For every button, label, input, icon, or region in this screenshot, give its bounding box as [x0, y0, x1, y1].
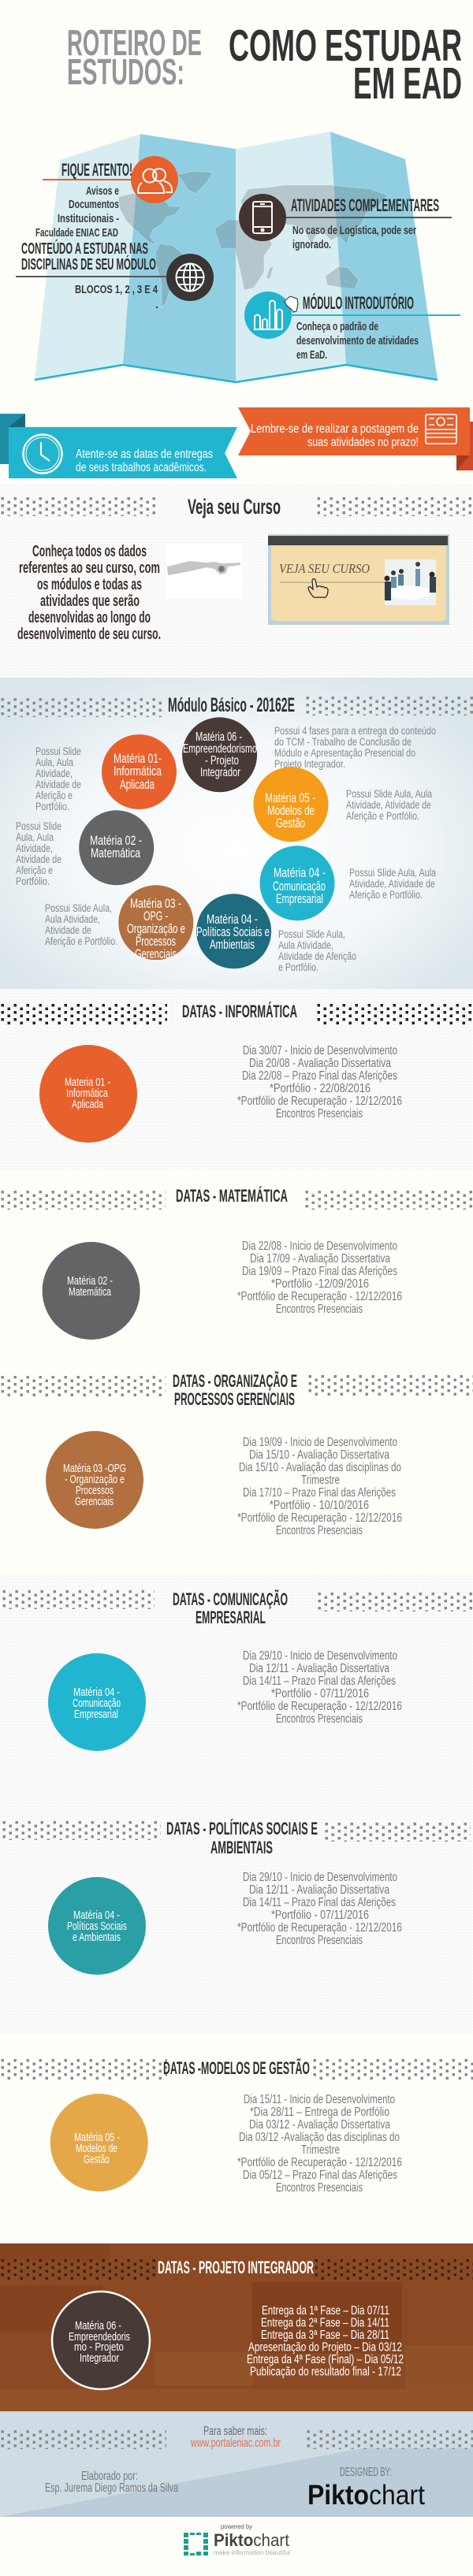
callout: fique atento: Documentos: [69, 198, 119, 211]
dates: Encontros Presenciais: [276, 1107, 363, 1121]
dates: Trimestre: [301, 2143, 340, 2157]
heading: módulo básico: Módulo Básico - 20162E: [168, 694, 295, 716]
circle: matéria 04 políticas: Políticas Sociais e: [196, 925, 270, 939]
circle: matéria 03: Processos: [136, 935, 176, 949]
circle: matéria 05: Matéria 05 -: [265, 791, 315, 805]
dates: [237, 1436, 402, 1537]
description: matéria 04 comunicação: Atividade, Atividade de: [349, 878, 435, 890]
circle: matéria 05: Gestão: [276, 816, 305, 831]
dates: Encontros Presenciais: [276, 1934, 363, 1947]
description: matéria 06: Possui 4 fases para a entrega do conteúdo: [274, 725, 436, 737]
heading: AMBIENTAIS: [210, 1838, 273, 1857]
callout: atividades complementares: [239, 194, 452, 251]
dates: [247, 2304, 404, 2378]
circle: matéria 04 políticas: Matéria 04 -: [207, 913, 258, 927]
circle: matéria 03: - Organização e: [65, 1474, 125, 1486]
dates: Trimestre: [301, 1474, 340, 1487]
circle: matéria 01: [102, 734, 177, 809]
circle: matéria 02: [79, 810, 154, 885]
dates: Entrega da 4ª Fase (Final) – Dia 05/12: [247, 2353, 404, 2366]
text: designed by: DESIGNED BY:: [340, 2466, 392, 2479]
heading: DATAS - COMUNICAÇÃO: [173, 1589, 288, 1609]
description: matéria 01: Aferição e: [35, 790, 73, 801]
text: elaborado por: Elaborado por:: [81, 2470, 138, 2483]
circle: matéria 04: Matéria 04 -: [73, 1686, 120, 1699]
dates: *Portfólio - 07/11/2016: [271, 1909, 369, 1922]
heading: DATAS - INFORMÁTICA: [182, 1002, 297, 1021]
circle: matéria 02: [43, 1242, 140, 1340]
description: matéria 03: Possui Slide Aula,: [45, 902, 112, 914]
circle: matéria 06: mo - Projeto: [74, 2341, 124, 2354]
badge: powered by piktochart: powered by: [221, 2523, 252, 2530]
callout: fique atento: Avisos e: [86, 184, 119, 198]
circle: matéria 04: e Ambientais: [73, 1931, 121, 1944]
description: matéria 02: Portfólio.: [16, 875, 50, 887]
dates: Dia 14/11 – Prazo Final das Aferições: [243, 1896, 396, 1909]
description: matéria 06: do TCM - Trabalho de Conclusão de: [274, 736, 412, 748]
dates: Dia 20/08 - Avaliação Dissertativa: [249, 1057, 391, 1070]
section: datas modelos de gestão: [0, 2058, 473, 2195]
circle: matéria 02: Matéria 02 -: [90, 834, 142, 848]
panel: folded map: [35, 132, 438, 382]
dates: Encontros Presenciais: [276, 1524, 363, 1537]
circle: matéria 01: Aplicada: [120, 778, 155, 792]
circle: matéria 04 comunicação: Empresarial: [276, 892, 323, 906]
circle: matéria 04 políticas: Ambientais: [210, 938, 255, 952]
callout: atividades complementares: ignorado.: [292, 238, 331, 251]
text block: conheça: os módulos e todas as: [37, 576, 142, 593]
heading: [173, 1589, 288, 1627]
dates: Publicação do resultado final - 17/12: [250, 2366, 401, 2378]
text: para saber mais: Para saber mais:: [203, 2425, 267, 2438]
description: matéria 02: Aferição e: [16, 864, 53, 876]
dates: *Dia 28/11 – Entrega de Portfólio: [250, 2106, 389, 2119]
circle: matéria 03: [46, 1431, 143, 1529]
dates: Encontros Presenciais: [276, 1303, 363, 1316]
badge: powered by piktochart: make information beautiful: [214, 2549, 290, 2556]
section: datas matemática: [0, 1186, 473, 1340]
description: matéria 02: Possui Slide: [16, 820, 61, 832]
description: matéria 04 políticas: [278, 928, 356, 973]
description: matéria 06: Módulo e Apresentação Presencial do: [274, 747, 415, 759]
circle: matéria 06: Empreendedorismo: [183, 742, 257, 756]
card: veja seu curso: VEJA SEU CURSO: [279, 561, 370, 576]
text: elaborado por: [45, 2470, 178, 2495]
dates: Encontros Presenciais: [276, 1712, 363, 1726]
dates: [237, 1240, 402, 1316]
heading: DATAS - MATEMÁTICA: [176, 1186, 288, 1206]
circle: matéria 01: Informática: [66, 1087, 109, 1100]
text block: conheça: atividades que serão: [40, 593, 140, 610]
callout: fique atento: [35, 156, 178, 240]
dates: Dia 05/12 – Prazo Final das Aferições: [243, 2169, 397, 2182]
circle: matéria 02: Matéria 02 -: [67, 1275, 113, 1288]
callout: conteúdo a estudar: BLOCOS 1, 2 , 3 E 4: [75, 283, 158, 296]
circle: matéria 05: Modelos de: [267, 804, 315, 818]
circle: matéria 04: Comunicação: [73, 1697, 121, 1710]
circle: matéria 02: Matemática: [69, 1286, 112, 1299]
section: projeto integrador on wood: [0, 2243, 473, 2411]
description: matéria 01: Atividade,: [35, 768, 73, 779]
circle: matéria 06: Integrador: [200, 766, 240, 779]
description: matéria 01: Portfólio.: [35, 801, 69, 812]
dates: Encontros Presenciais: [276, 2181, 363, 2195]
circle: matéria 04 políticas: [196, 894, 271, 968]
dates: Apresentação do Projeto – Dia 03/12: [248, 2340, 402, 2355]
banner: orange reminder: suas atividades no prazo!: [307, 436, 419, 449]
description: matéria 03: Aula Atividade,: [45, 913, 100, 925]
dates: *Portfólio - 22/08/2016: [270, 1082, 371, 1095]
circle: matéria 05: Matéria 05 -: [74, 2132, 120, 2144]
heading: PROCESSOS GERENCIAIS: [174, 1389, 295, 1409]
circle: matéria 05: [254, 767, 328, 842]
section: datas organização: [0, 1371, 473, 1537]
description: matéria 03: Atividade de: [45, 924, 91, 936]
text: elaborado por: Esp. Jurema Diego Ramos da Silva: [45, 2481, 178, 2495]
dates: Entrega da 2ª Fase – Dia 14/11: [261, 2317, 389, 2329]
circle: matéria 04 comunicação: Matéria 04 -: [274, 866, 326, 880]
dates: [237, 1649, 402, 1726]
description: matéria 05: Aferição e Portfólio.: [346, 810, 419, 822]
panel: footer: [0, 2411, 473, 2517]
dates: Dia 17/09 - Avaliação Dissertativa: [250, 1252, 390, 1266]
title: roteiro de estudos: [67, 22, 202, 92]
dates: Dia 22/08 - Inicio de Desenvolvimento: [242, 1240, 397, 1253]
dates: Dia 12/11 - Avaliação Dissertativa: [249, 1883, 389, 1897]
dates: *Portfólio de Recuperação - 12/12/2016: [237, 1700, 402, 1713]
description: matéria 04 comunicação: [349, 867, 436, 901]
circle: matéria 04: Políticas Sociais: [67, 1920, 127, 1933]
heading: veja seu curso: Veja seu Curso: [188, 495, 281, 519]
circle: matéria 06: Matéria 06 -: [75, 2320, 121, 2333]
dates: Dia 14/11 – Prazo Final das Aferições: [243, 1675, 396, 1688]
dates: Dia 29/10 - Inicio de Desenvolvimento: [243, 1871, 397, 1884]
dates: Dia 15/10 - Avaliação Dissertativa: [249, 1448, 389, 1462]
circle: matéria 03: OPG -: [143, 909, 168, 924]
circle: matéria 06: Empreendedoris: [69, 2331, 130, 2344]
text block: conheça: Conheça todos os dados: [32, 543, 147, 560]
dates: Entrega da 1ª Fase – Dia 07/11: [262, 2304, 389, 2318]
description: matéria 06: Projeto Integrador.: [274, 758, 345, 770]
dates: *Portfólio -12/09/2016: [271, 1277, 369, 1291]
dates: Dia 22/08 – Prazo Final das Aferições: [242, 1069, 397, 1083]
text block: conheça: desenvolvimento de seu curso.: [17, 626, 161, 643]
dates: [237, 1044, 402, 1121]
circle: matéria 06: Matéria 06 -: [196, 730, 242, 744]
circle: matéria 06: [52, 2292, 150, 2389]
callout: módulo introdutório: em EaD.: [296, 348, 327, 362]
description: matéria 05: [346, 788, 432, 822]
icon: people: [131, 156, 178, 203]
description: matéria 04 políticas: e Portfólio.: [278, 961, 318, 973]
section: datas comunicação: [2, 1589, 473, 1751]
callout: módulo introdutório: desenvolvimento de atividades: [296, 334, 419, 348]
badge: powered by piktochart: Piktochart: [214, 2530, 289, 2550]
circle: matéria 04 comunicação: Comunicação: [273, 879, 326, 894]
heading: DATAS - POLÍTICAS SOCIAIS E: [166, 1819, 318, 1838]
dates: Dia 12/11 - Avaliação Dissertativa: [249, 1662, 389, 1675]
heading: DATAS -MODELOS DE GESTÃO: [163, 2058, 310, 2078]
heading: veja seu curso: [0, 495, 473, 519]
circle: matéria 01: [39, 1045, 137, 1143]
dates: *Portfólio de Recuperação - 12/12/2016: [237, 1511, 402, 1525]
dates: Dia 19/09 - Inicio de Desenvolvimento: [243, 1436, 397, 1449]
dates: [237, 2093, 402, 2195]
description: matéria 02: [16, 820, 61, 887]
world map: [118, 171, 388, 307]
text block: conheça: [17, 543, 161, 643]
circle: matéria 04: [48, 1653, 146, 1751]
dates: Dia 30/07 - Inicio de Desenvolvimento: [243, 1044, 397, 1058]
dates: Dia 19/09 – Prazo Final das Aferições: [242, 1265, 397, 1278]
description: matéria 03: Aferição e Portfólio.: [45, 935, 117, 947]
circle: matéria 06: [182, 717, 257, 792]
dates: Entrega da 3ª Fase – Dia 28/11: [261, 2329, 389, 2342]
banner: orange reminder: Lembre-se de realizar a postagem de: [251, 422, 419, 436]
photo: meeting: [385, 559, 436, 605]
text block: conheça: desenvolvidas ao longo do: [28, 609, 151, 626]
heading: DATAS - PROJETO INTEGRADOR: [158, 2258, 314, 2277]
callout: fique atento: Institucionais -: [58, 212, 119, 225]
banner: orange reminder: [238, 407, 473, 470]
icon: globe: [166, 254, 214, 301]
icon: phone: [239, 194, 286, 241]
icon: pointing hand: [285, 296, 298, 312]
circle: matéria 01: Matéria 01-: [114, 752, 162, 766]
text: para saber mais: [190, 2425, 281, 2450]
dates: *Portfólio de Recuperação - 12/12/2016: [237, 1290, 402, 1303]
icon: bar chart: [244, 292, 292, 339]
callout: módulo introdutório: [244, 292, 460, 362]
title: roteiro de estudos: ROTEIRO DE: [67, 22, 202, 63]
dates: [237, 1871, 402, 1947]
description: matéria 04 políticas: Possui Slide Aula,: [278, 928, 345, 940]
description: matéria 04 comunicação: Aferição e Portfólio.: [349, 889, 423, 901]
description: matéria 05: Possui Slide Aula, Aula: [346, 788, 432, 800]
logo: piktochart: Piktochart: [307, 2480, 425, 2511]
circle: matéria 03: Organização e: [127, 922, 185, 936]
circle: matéria 01: Informática: [114, 764, 162, 779]
callout: conteúdo a estudar: DISCIPLINAS DE SEU MÓDULO: [21, 255, 156, 273]
callout: conteúdo a estudar: [16, 239, 214, 308]
circle: matéria 04 comunicação: [260, 846, 334, 920]
section: datas políticas: [2, 1819, 471, 1975]
callout: atividades complementares: No caso de Logística, pode ser: [292, 224, 416, 237]
heading: [166, 1819, 318, 1857]
circle: matéria 04: Empresarial: [74, 1708, 118, 1721]
description: matéria 03: [45, 902, 117, 947]
icon: hand cursor: [308, 579, 328, 597]
icon: clock: [24, 435, 61, 473]
dates: Dia 29/10 - Inicio de Desenvolvimento: [243, 1649, 397, 1663]
dates: *Portfólio de Recuperação - 12/12/2016: [237, 1095, 402, 1108]
dates: *Portfólio de Recuperação - 12/12/2016: [237, 2156, 402, 2169]
dates: Dia 15/11 - Inicio de Desenvolvimento: [244, 2093, 395, 2106]
circle: matéria 04: Matéria 04 -: [73, 1909, 120, 1922]
icon: pointing arm: [166, 544, 243, 599]
section: datas informática: [0, 1002, 473, 1143]
callout: módulo introdutório: Conheça o padrão de: [296, 320, 378, 333]
title: como estudar em EaD: [229, 20, 462, 109]
description: matéria 06: [274, 725, 436, 770]
description: matéria 02: Atividade,: [16, 842, 53, 854]
icon: piktochart mark: [184, 2533, 208, 2556]
heading: EMPRESARIAL: [196, 1608, 266, 1627]
description: matéria 04 políticas: Atividade de Aferição: [278, 950, 356, 962]
circle: matéria 02: Matemática: [91, 846, 141, 861]
callout: fique atento: FIQUE ATENTO!: [61, 160, 132, 180]
banner: teal reminder: de seus trabalhos acadêmicos.: [76, 461, 207, 474]
description: matéria 01: [35, 745, 81, 812]
circle: matéria 03: [118, 885, 193, 961]
circle: matéria 03: Processos: [76, 1485, 114, 1497]
description: matéria 04 comunicação: Possui Slide Aula, Aula: [349, 867, 436, 879]
badge: powered by piktochart: [184, 2523, 290, 2556]
description: matéria 02: Aula, Aula: [16, 831, 54, 843]
circle: matéria 01: Aplicada: [72, 1098, 104, 1111]
callout: conteúdo a estudar: CONTEÚDO A ESTUDAR NAS: [21, 239, 148, 258]
title: roteiro de estudos: ESTUDOS:: [67, 51, 184, 92]
description: matéria 01: Atividade de: [35, 779, 81, 790]
dates: *Portfólio de Recuperação - 12/12/2016: [237, 1921, 402, 1935]
circle: matéria 03: Gerenciais: [135, 947, 177, 961]
description: matéria 02: Atividade de: [16, 853, 61, 865]
card: veja seu curso: [268, 534, 449, 625]
description: matéria 05: Atividade, Atividade de: [346, 799, 431, 811]
heading: [173, 1371, 297, 1409]
circle: matéria 05: Gestão: [84, 2154, 110, 2166]
dates: Dia 03/12 -Avaliação das disciplinas do: [239, 2131, 400, 2144]
circle: matéria 04: [48, 1877, 146, 1975]
circle: matéria 03: Gerenciais: [75, 1496, 114, 1508]
circle: matéria 03: Matéria 03 -: [130, 897, 181, 911]
text: para saber mais: www.portaleniac.com.br: [190, 2437, 281, 2450]
circle: matéria 06: Integrador: [80, 2352, 119, 2365]
dates: Dia 15/10 - Avaliação das disciplinas do: [239, 1461, 401, 1474]
banner: teal reminder: Atente-se as datas de entregas: [76, 448, 213, 461]
circle: matéria 05: Modelos de: [76, 2143, 117, 2155]
circle: matéria 01: Materia 01 -: [65, 1076, 110, 1089]
dates: *Portfólio - 10/10/2016: [270, 1499, 369, 1512]
description: matéria 04 políticas: Aula Atividade,: [278, 939, 333, 951]
circle: matéria 03: Matéria 03 -OPG: [63, 1463, 126, 1475]
callout: fique atento: Faculdade ENIAC EAD: [35, 226, 118, 240]
panel: módulo básico: [0, 678, 473, 989]
dates: Dia 17/10 – Prazo Final das Aferições: [243, 1486, 396, 1500]
dates: *Portfólio - 07/11/2016: [271, 1687, 369, 1701]
circle: matéria 06: - Projeto: [205, 754, 239, 768]
icon: banknote: [426, 414, 456, 444]
heading: DATAS - ORGANIZAÇÃO E: [173, 1371, 297, 1391]
banner: teal reminder: [0, 414, 237, 478]
description: matéria 01: Aula, Aula: [35, 756, 73, 768]
dates: Dia 03/12 - Avaliação Dissertativa: [249, 2118, 390, 2132]
text block: conheça: referentes ao seu curso, com: [19, 559, 160, 577]
circle: matéria 05: [50, 2094, 148, 2191]
description: matéria 01: Possui Slide: [35, 745, 81, 757]
